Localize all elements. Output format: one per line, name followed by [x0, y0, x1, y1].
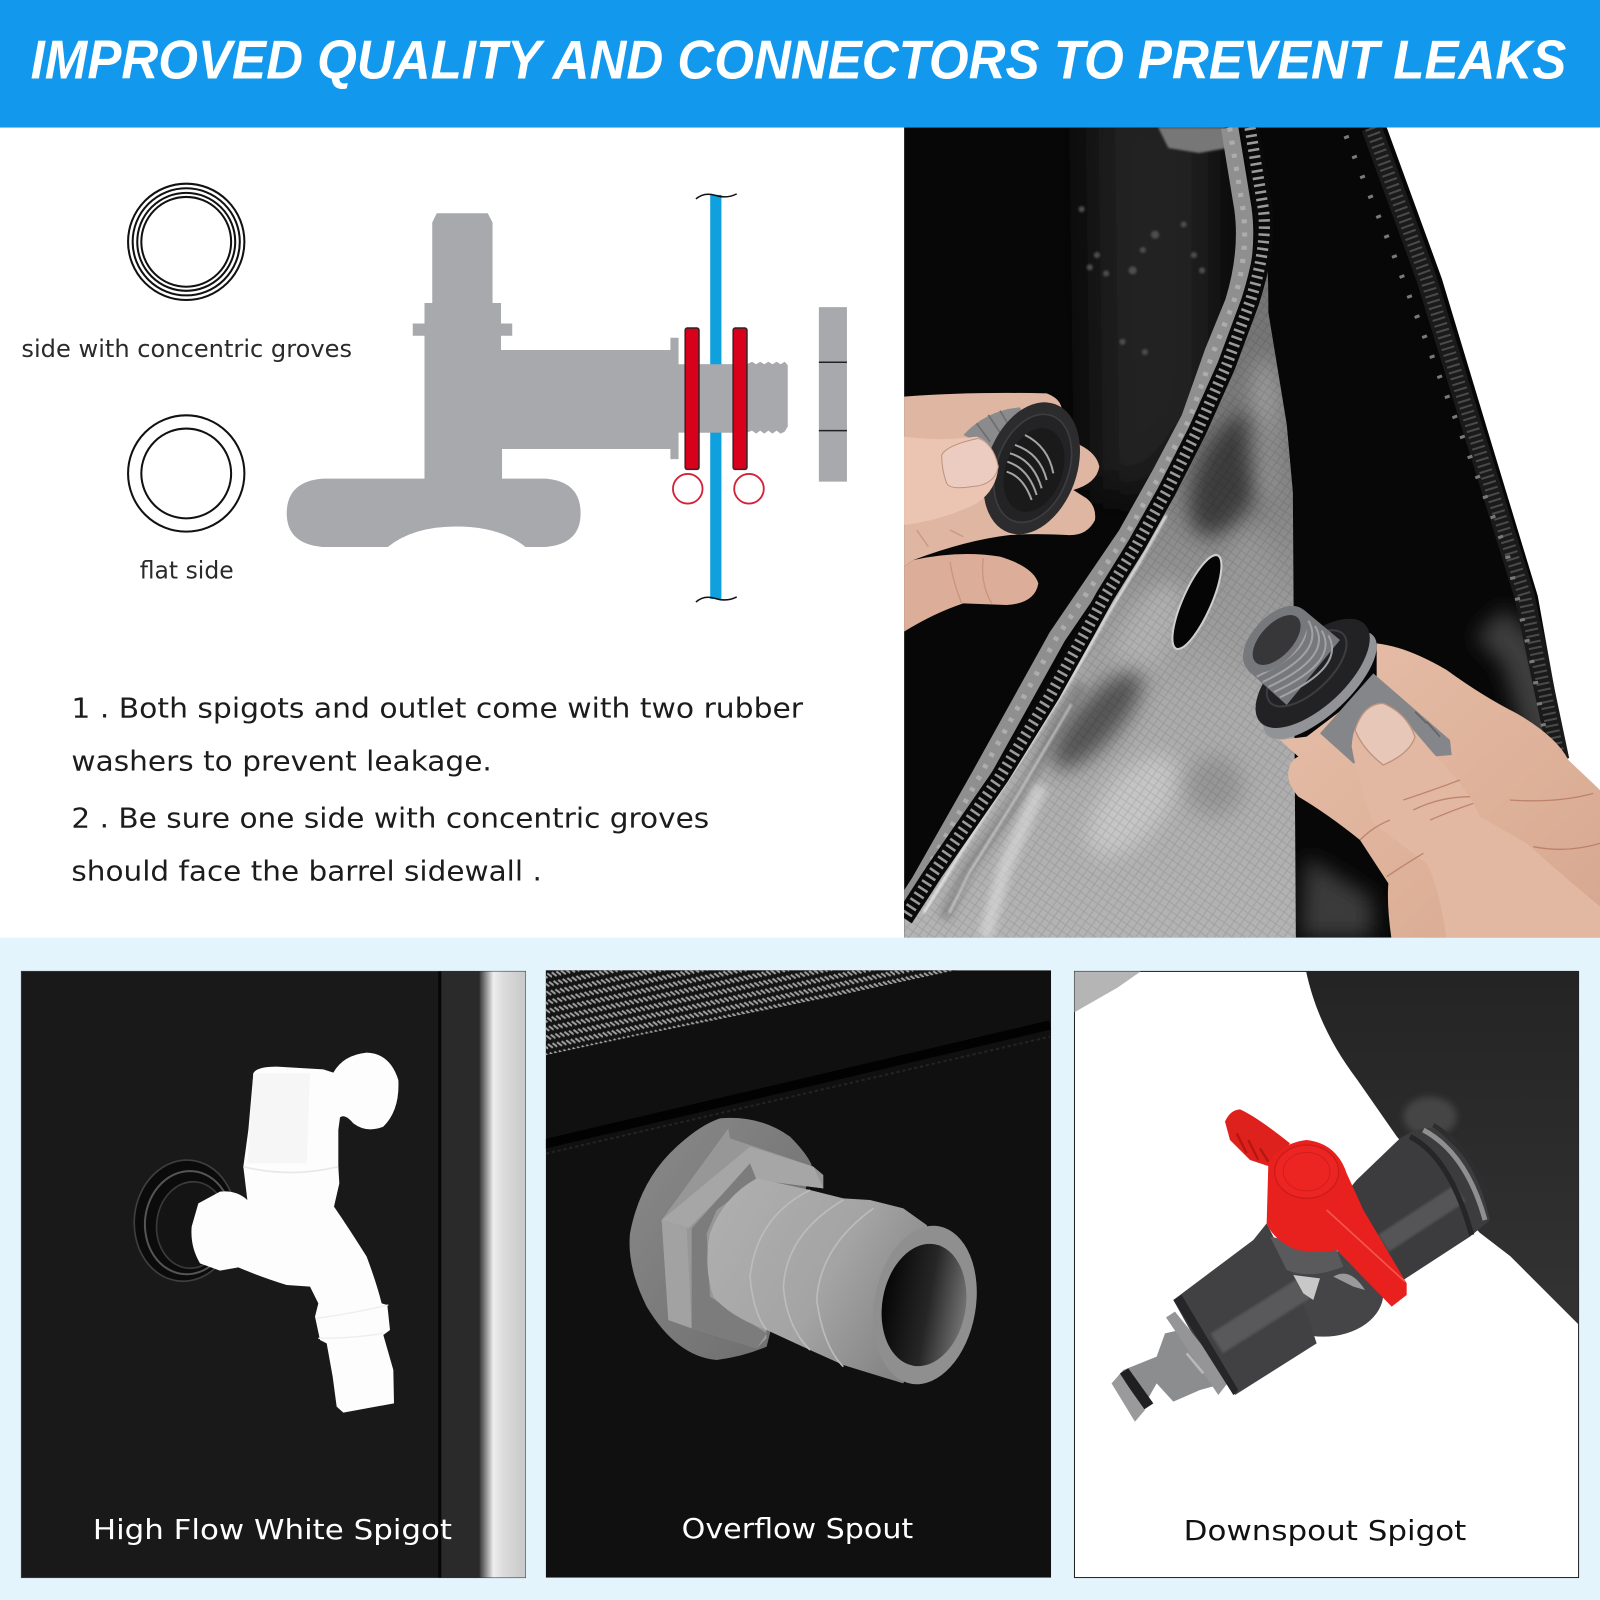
light streaks along zipper — [923, 515, 1166, 913]
far wall reflection — [1490, 622, 1551, 755]
grey corner — [1074, 971, 1141, 1012]
inner wall sheen — [1092, 102, 1214, 490]
instructions text: 1 . Both spigots and outlet come with two rubber — [71, 692, 804, 724]
icon: washer side with concentric grooves — [128, 184, 244, 300]
zipper — [904, 128, 1264, 918]
folded wall highlight — [1158, 128, 1228, 153]
lower right dark reflection — [1301, 857, 1372, 938]
panel: downspout spigot — [1074, 971, 1579, 1578]
thumbnail — [942, 438, 998, 488]
white background — [1387, 128, 1600, 806]
far zipper band — [1346, 128, 1559, 760]
instructions text: 2 . Be sure one side with concentric groves — [71, 803, 709, 835]
washer callout circles — [673, 474, 764, 504]
caption: High Flow White Spigot — [93, 1514, 452, 1546]
bottom band background — [0, 938, 1600, 1600]
panel: washer and faucet diagram — [21, 184, 847, 602]
right hand — [1231, 594, 1600, 940]
header banner — [0, 0, 1600, 128]
silver edging — [904, 128, 1245, 906]
instructions text — [71, 692, 804, 888]
small locknut held in left hand — [964, 402, 1080, 534]
caption: Downspout Spigot — [1184, 1515, 1467, 1547]
caption: Overflow Spout — [682, 1513, 913, 1545]
seam strip — [442, 972, 480, 1577]
threaded connector — [1243, 606, 1452, 764]
pipe through wall — [699, 364, 733, 433]
spout — [630, 1118, 989, 1393]
ball valve — [1112, 1097, 1492, 1422]
panel: photo of hands fitting connectors into the barrel — [904, 102, 1600, 944]
white spigot with flange — [128, 1053, 398, 1413]
left hand — [904, 389, 1099, 632]
barrel wall — [710, 195, 721, 599]
faucet silhouette — [287, 213, 788, 547]
silver flap — [904, 271, 1296, 938]
panel: overflow spout — [540, 970, 1051, 1578]
water droplets — [1079, 206, 1205, 355]
red handle — [1225, 1109, 1290, 1167]
break marks — [696, 194, 737, 602]
panel: high flow white spigot — [21, 971, 526, 1578]
barrel bag — [1306, 971, 1579, 1324]
label: concentric side: side with concentric groves — [21, 335, 352, 363]
icon: washer flat side — [128, 415, 244, 532]
thumbnail — [1355, 703, 1415, 765]
instructions text: should face the barrel sidewall . — [71, 856, 542, 888]
zipper band and seam — [540, 970, 1050, 1155]
flap hole — [1171, 554, 1222, 650]
lock nut — [819, 307, 847, 482]
label: flat side: flat side — [140, 557, 234, 585]
instructions text: washers to prevent leakage. — [71, 745, 492, 777]
rubber washers — [685, 328, 747, 469]
hose connector — [1112, 1328, 1218, 1422]
